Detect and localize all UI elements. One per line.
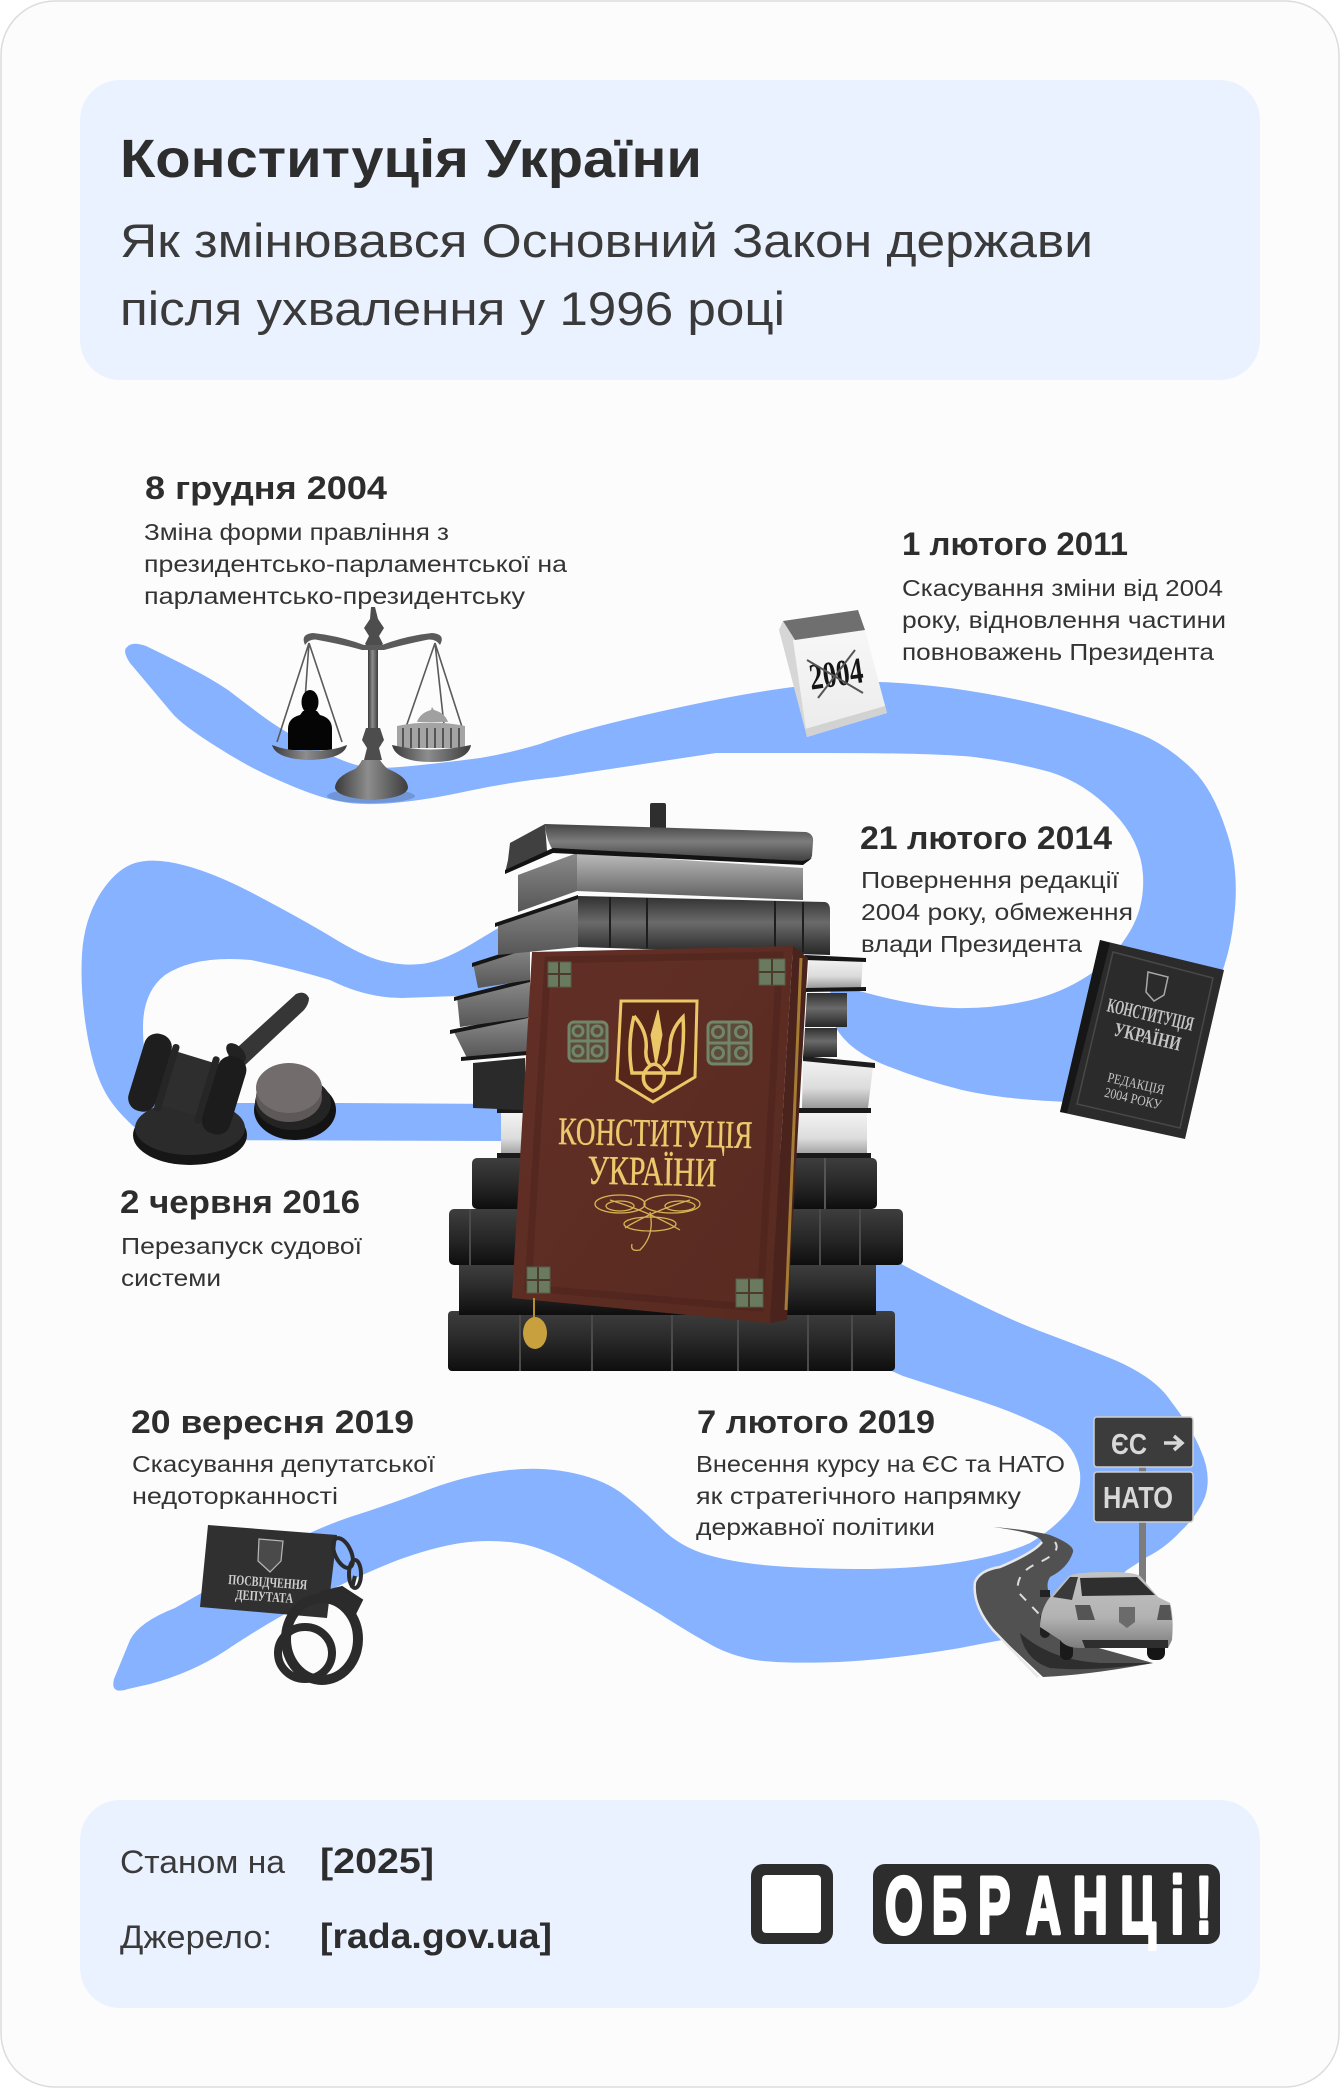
timeline ribbon	[82, 644, 1236, 1691]
text block: 20 September 2019: недоторканності	[132, 1483, 338, 1509]
icon: road and car	[975, 1527, 1173, 1677]
main illustration: stack of books	[448, 803, 903, 1371]
text block: 7 February 2019: 7 лютого 2019	[697, 1404, 935, 1440]
icon: tear-off calendar 2004: 2004	[807, 650, 866, 699]
source info: Джерело:	[120, 1919, 272, 1955]
subtitle: після ухвалення у 1996 році	[120, 282, 785, 335]
icon: deputy ID and handcuffs: ДЕПУТАТА	[235, 1588, 294, 1607]
text block: 8 December 2004: Зміна форми правління з	[144, 519, 449, 545]
text block: 1 February 2011: Скасування зміни від 2004	[902, 575, 1223, 601]
book title: УКРАЇНИ	[587, 1147, 717, 1195]
text block: 1 February 2011	[902, 526, 1226, 665]
text block: 8 December 2004: 8 грудня 2004	[145, 470, 387, 506]
text block: 21 February 2014: 21 лютого 2014	[860, 820, 1112, 856]
sign: EU: ЄС	[1111, 1429, 1147, 1461]
emblem: trident shield	[617, 1001, 697, 1102]
icon: constitution 2004 edition book	[1060, 940, 1224, 1139]
icon: constitution 2004 edition book: УКРАЇНИ	[1112, 1018, 1183, 1056]
text block: 21 February 2014: Повернення редакції	[861, 867, 1120, 893]
text block: 8 December 2004: парламентсько-президентську	[144, 583, 526, 609]
source info: [2025]	[320, 1842, 434, 1881]
text block: 7 February 2019: державної політики	[696, 1514, 935, 1540]
text block: 7 February 2019	[696, 1404, 1065, 1540]
text block: 20 September 2019: Скасування депутатської	[132, 1451, 436, 1477]
icon: scales	[272, 607, 471, 803]
text block: 2 June 2016: 2 червня 2016	[120, 1184, 360, 1220]
icon: tear-off calendar 2004	[779, 610, 887, 737]
source info: [rada.gov.ua]	[320, 1917, 552, 1956]
text block: 1 February 2011: повноважень Президента	[902, 639, 1214, 665]
sign: EU	[1094, 1417, 1193, 1467]
side ornaments	[569, 1022, 751, 1064]
subtitle: Як змінювався Основний Закон держави	[120, 214, 1093, 267]
text block: 1 February 2011: 1 лютого 2011	[902, 526, 1128, 562]
panel: header	[80, 80, 1260, 380]
sign: NATO: НАТО	[1103, 1480, 1173, 1515]
text block: 20 September 2019	[131, 1404, 436, 1509]
title: Конституція України	[120, 129, 702, 189]
text block: 8 December 2004: президентсько-парламентської на	[144, 551, 567, 577]
handcuffs	[278, 1535, 362, 1680]
book: Constitution of Ukraine cover	[512, 946, 808, 1349]
text block: 2 June 2016: системи	[121, 1265, 221, 1291]
icon: silhouette on the left pan	[288, 690, 332, 750]
icon: constitution 2004 edition book: 2004 РОКУ	[1103, 1086, 1163, 1113]
icon: deputy ID and handcuffs: ПОСВІДЧЕННЯ	[228, 1573, 308, 1594]
text block: 8 December 2004	[144, 470, 567, 609]
text block: 1 February 2011: року, відновлення частини	[902, 607, 1226, 633]
source info	[120, 1842, 552, 1956]
corner ornaments	[527, 959, 785, 1307]
icon: deputy ID and handcuffs	[200, 1525, 362, 1680]
book stack	[448, 824, 903, 1371]
text block: 7 February 2019: Внесення курсу на ЄС та НАТО	[696, 1451, 1065, 1477]
source info: Станом на	[120, 1844, 285, 1880]
logo: wordmark: ОБРАНЦі!	[885, 1861, 1212, 1951]
text block: 21 February 2014: влади Президента	[861, 931, 1082, 957]
subtitle	[120, 214, 1093, 335]
text block: 2 June 2016	[120, 1184, 363, 1291]
striking block	[254, 1063, 336, 1140]
logo: square mark	[751, 1864, 833, 1944]
text block: 21 February 2014: 2004 року, обмеження	[861, 899, 1133, 925]
gavel base	[133, 1101, 247, 1165]
text block: 21 February 2014	[860, 820, 1133, 957]
icon: judge gavel	[125, 993, 336, 1165]
bookmark medal	[523, 1298, 547, 1349]
text block: 20 September 2019: 20 вересня 2019	[131, 1404, 414, 1440]
icon: road signs EU and NATO	[1094, 1417, 1193, 1585]
icon: constitution 2004 edition book: КОНСТИТУЦІЯ	[1105, 995, 1196, 1036]
text block: 2 June 2016: Перезапуск судової	[121, 1233, 363, 1259]
sign: NATO	[1094, 1472, 1193, 1522]
panel: footer	[80, 1800, 1260, 2008]
icon: parliament building on the right pan	[397, 707, 465, 748]
book title: КОНСТИТУЦІЯ	[558, 1110, 753, 1157]
road	[975, 1527, 1153, 1677]
text block: 7 February 2019: як стратегічного напрямку	[696, 1483, 1022, 1509]
book title	[557, 1110, 753, 1196]
gold flourish	[595, 1195, 700, 1250]
icon: constitution 2004 edition book: РЕДАКЦІЯ	[1106, 1071, 1166, 1098]
car	[1040, 1572, 1173, 1660]
gavel head	[125, 1030, 250, 1138]
